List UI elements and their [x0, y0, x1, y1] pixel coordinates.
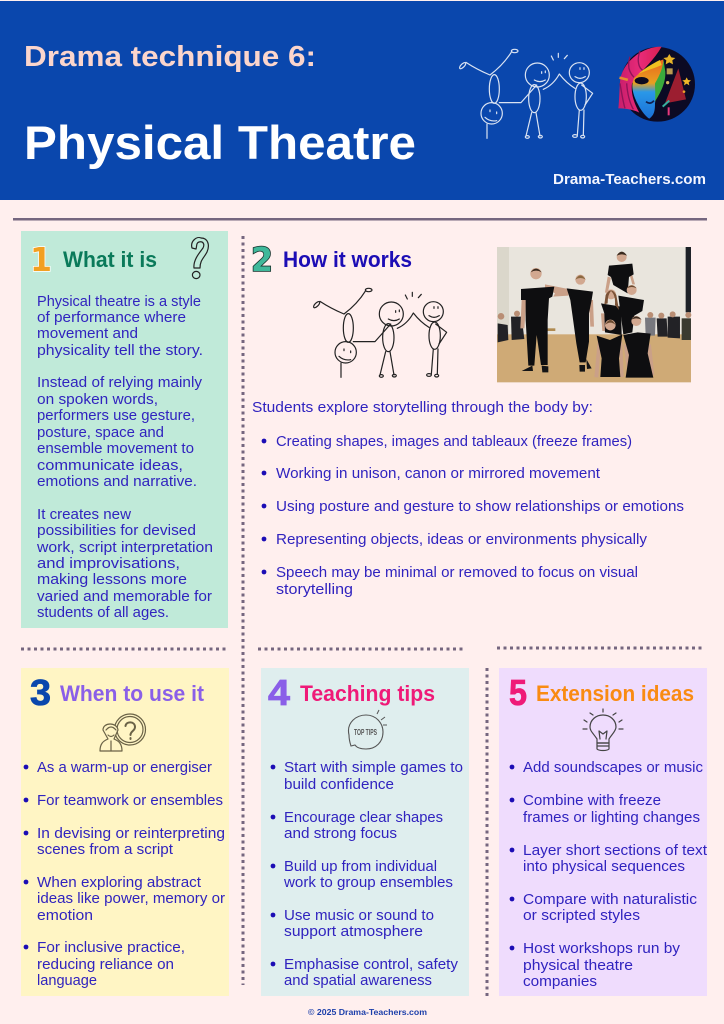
- bullet list: when to use it: In devising or reinterpreting: [37, 826, 225, 842]
- icon: person and clock: [100, 714, 146, 751]
- bullet list: when to use it: As a warm-up or energiser: [37, 760, 212, 776]
- body text: work, script interpretation: [36, 540, 213, 556]
- bullet list: teaching tips: Emphasise control, safety: [284, 957, 459, 973]
- number 1: 1: [30, 240, 52, 279]
- bullet list: how it works: Working in unison, canon or mirrored movement: [276, 466, 600, 482]
- icon: light bulb: [583, 709, 623, 750]
- body text: posture, space and: [37, 425, 164, 441]
- bullet list: teaching tips: and spatial awareness: [284, 973, 432, 989]
- middle man: [618, 296, 644, 334]
- panel: extension ideas: [499, 668, 707, 996]
- photo: performers in a group pose: [497, 247, 691, 382]
- bullet list: extension ideas: companies: [523, 974, 597, 990]
- number 5: 5: [509, 672, 527, 713]
- standing man: [520, 300, 526, 328]
- body text: physicality tell the story.: [37, 343, 203, 359]
- bullet list: extension ideas: Combine with freeze: [523, 793, 661, 809]
- bullet list: when to use it: scenes from a script: [37, 842, 173, 858]
- bullet list: how it works: Creating shapes, images and tableaux (freeze frames): [276, 434, 632, 450]
- body text: possibilities for devised: [37, 523, 196, 539]
- icon: stick figures: [459, 49, 593, 138]
- seated audience: [498, 317, 691, 342]
- bullet list: how it works: storytelling: [276, 582, 353, 598]
- bullet list: extension ideas: physical theatre: [523, 958, 633, 974]
- bullet list: extension ideas: frames or lighting changes: [523, 810, 700, 826]
- body text: ensemble movement to: [37, 441, 194, 457]
- bullet list: teaching tips: [271, 760, 463, 989]
- bullet list: how it works: Representing objects, ideas or environments physically: [276, 532, 648, 548]
- bullet list: teaching tips: build confidence: [284, 777, 394, 793]
- icon: top tips speech bubble: [348, 710, 387, 749]
- panel: how it works: [251, 240, 691, 598]
- bullet list: extension ideas: Compare with naturalistic: [523, 892, 698, 908]
- top man: [605, 275, 635, 293]
- heading: extension ideas: Extension ideas: [536, 681, 694, 706]
- site name: Drama-Teachers.com: [553, 172, 706, 188]
- bullet list: how it works: [262, 434, 684, 598]
- heading: what it is: What it is: [63, 247, 157, 272]
- number 3: 3: [30, 672, 51, 713]
- bullet list: teaching tips: and strong focus: [284, 826, 397, 842]
- number 2: 2: [251, 240, 273, 279]
- header banner: [0, 1, 724, 200]
- bullet list: extension ideas: [510, 760, 707, 990]
- body text: emotions and narrative.: [37, 474, 197, 490]
- bullet list: extension ideas: or scripted styles: [523, 908, 640, 924]
- bullet list: extension ideas: Add soundscapes or music: [523, 760, 704, 776]
- bullet list: how it works: Speech may be minimal or removed to focus on visual: [276, 565, 638, 581]
- seated man: [624, 344, 654, 375]
- panel: when to use it: [21, 668, 229, 996]
- bullet list: teaching tips: work to group ensembles: [283, 875, 453, 891]
- icon: question mark: [192, 238, 208, 279]
- illustration: stick figures: [313, 288, 447, 377]
- bullet list: when to use it: emotion: [37, 908, 93, 924]
- body text: and improvisations,: [37, 556, 180, 572]
- intro line: Students explore storytelling through the body by:: [252, 400, 593, 416]
- title: drama technique: Drama technique 6:: [24, 41, 316, 73]
- bullet list: extension ideas: Layer short sections of text: [523, 843, 707, 859]
- standing woman: [545, 284, 594, 327]
- middle woman: [601, 313, 605, 331]
- bullet list: when to use it: ideas like power, memory or: [37, 891, 225, 907]
- body text: movement and: [37, 326, 138, 342]
- panel: what it is: [21, 231, 228, 628]
- bullet list: when to use it: For teamwork or ensembles: [37, 793, 223, 809]
- title: physical theatre: Physical Theatre: [24, 116, 416, 169]
- icon: theatre mask logo: [618, 47, 695, 122]
- bullet list: extension ideas: into physical sequences: [523, 859, 685, 875]
- bullet list: when to use it: [24, 760, 225, 989]
- body text: varied and memorable for: [37, 589, 212, 605]
- body text: on spoken words,: [37, 392, 158, 408]
- number 4: 4: [268, 672, 290, 713]
- icon: top tips speech bubble: TOP TIPS: [354, 728, 377, 737]
- heading: how it works: How it works: [283, 247, 412, 272]
- body text: It creates new: [37, 507, 131, 523]
- body text: students of all ages.: [37, 605, 169, 621]
- body text: Physical theatre is a style: [37, 294, 201, 310]
- bullet list: how it works: Using posture and gesture to show relationships or emotions: [276, 499, 684, 515]
- bullet list: when to use it: reducing reliance on: [37, 957, 174, 973]
- body text: communicate ideas,: [37, 458, 183, 474]
- bullet list: when to use it: language: [37, 973, 97, 989]
- panel: teaching tips: [261, 668, 469, 996]
- heading: when to use it: When to use it: [60, 681, 205, 706]
- bullet list: when to use it: When exploring abstract: [37, 875, 201, 891]
- bullet list: teaching tips: Use music or sound to: [284, 908, 434, 924]
- heading: teaching tips: Teaching tips: [300, 681, 435, 706]
- bullet list: when to use it: For inclusive practice,: [37, 940, 185, 956]
- seated woman: [594, 342, 624, 378]
- bullet list: extension ideas: Host workshops run by: [523, 941, 681, 957]
- bullet list: teaching tips: Start with simple games to: [284, 760, 463, 776]
- body text: Instead of relying mainly: [37, 375, 203, 391]
- body text: of performance where: [37, 310, 186, 326]
- body text: performers use gesture,: [37, 408, 195, 424]
- footer copyright: © 2025 Drama-Teachers.com: [308, 1007, 427, 1017]
- bullet list: teaching tips: Build up from individual: [284, 859, 437, 875]
- bullet list: teaching tips: support atmosphere: [284, 924, 423, 940]
- bullet list: teaching tips: Encourage clear shapes: [284, 810, 443, 826]
- body text: making lessons more: [37, 572, 187, 588]
- body text: [36, 294, 213, 621]
